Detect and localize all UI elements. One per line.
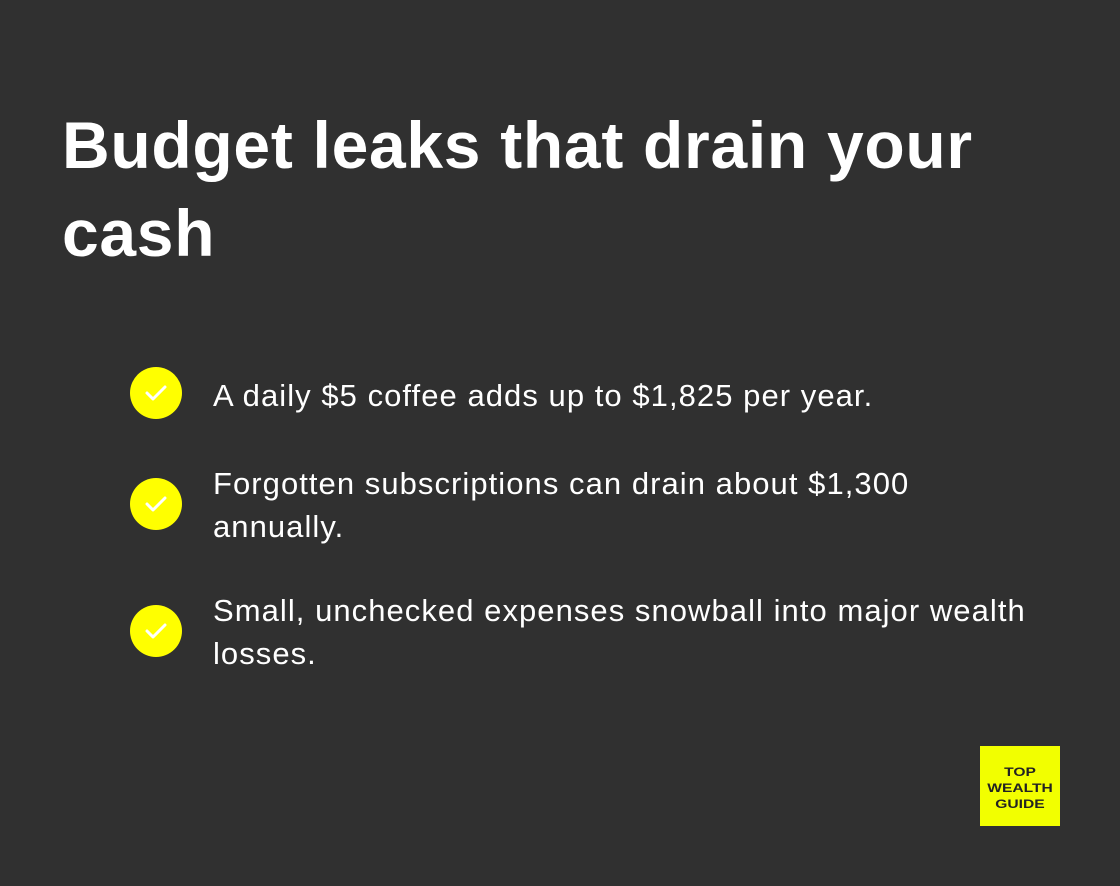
item 2	[130, 466, 909, 544]
icon: check	[130, 478, 182, 530]
text: losses.	[213, 636, 317, 671]
logo	[980, 746, 1060, 826]
item 3	[130, 593, 1026, 671]
logo: GUIDE	[995, 797, 1045, 811]
icon: check	[130, 605, 182, 657]
text	[213, 466, 909, 544]
icon: check	[130, 367, 182, 419]
text: annually.	[213, 509, 344, 544]
text: A daily $5 coffee adds up to $1,825 per year.	[213, 378, 873, 413]
item 1	[130, 367, 873, 419]
title: cash	[62, 196, 215, 270]
title	[62, 108, 973, 270]
text: Forgotten subscriptions can drain about $1,300	[213, 466, 909, 501]
logo: WEALTH	[987, 781, 1053, 795]
text: Small, unchecked expenses snowball into major wealth	[213, 593, 1026, 628]
title: Budget leaks that drain your	[62, 108, 973, 182]
logo: TOP	[1004, 765, 1036, 779]
text	[213, 593, 1026, 671]
